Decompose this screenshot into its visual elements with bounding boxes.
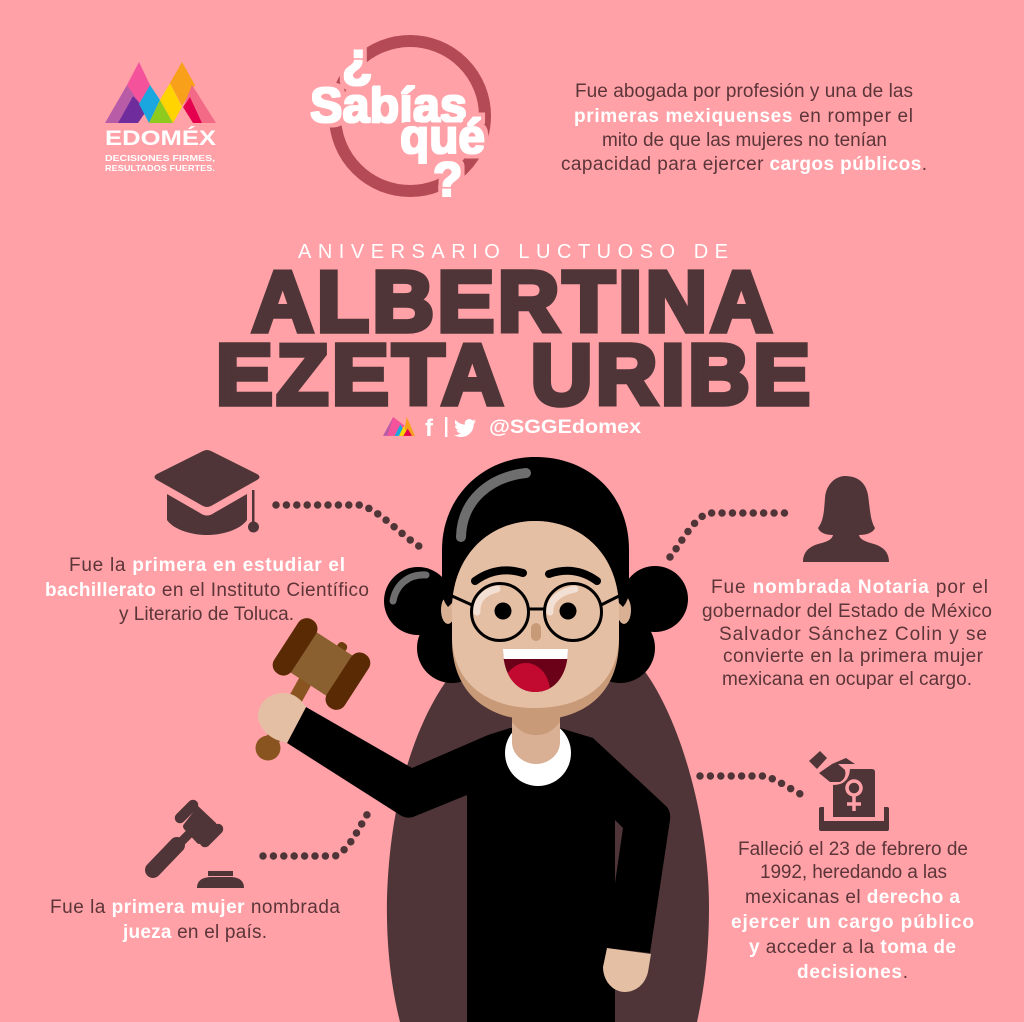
text: notaria: Fue nombrada Notaria por el bbox=[711, 577, 988, 598]
text: notaria: Salvador Sánchez Colin y se bbox=[719, 624, 987, 645]
ears bbox=[441, 596, 455, 624]
intro text: Fue abogada por profesión y una de las bbox=[575, 81, 913, 102]
neck bbox=[512, 700, 560, 764]
mouth bbox=[503, 649, 568, 692]
icon: woman silhouette bbox=[803, 476, 889, 562]
robe bbox=[387, 665, 709, 1022]
text: jueza: Fue la primera mujer nombrada bbox=[50, 897, 340, 918]
intro text: mito de que las mujeres no tenían bbox=[602, 130, 887, 151]
icon: small gavel bbox=[153, 805, 244, 888]
text: bachillerato: y Literario de Toluca. bbox=[119, 604, 294, 625]
logo: Edoméx: RESULTADOS FUERTES. bbox=[105, 163, 215, 173]
text: notaria: convierte en la primera mujer bbox=[723, 646, 984, 667]
text: jueza: jueza en el país. bbox=[122, 922, 267, 943]
character: judge bbox=[256, 457, 709, 1022]
text: legado: Falleció el 23 de febrero de bbox=[738, 839, 968, 860]
robe torso and sleeves bbox=[287, 707, 670, 953]
text: legado: ejercer un cargo público bbox=[731, 912, 974, 933]
right hand bbox=[603, 948, 651, 992]
text: bachillerato: bachillerato en el Instituto Científico bbox=[45, 580, 369, 601]
collar bbox=[505, 720, 571, 786]
text: notaria bbox=[702, 577, 992, 690]
left hand bbox=[258, 693, 306, 743]
logo: Edoméx bbox=[105, 62, 216, 173]
title: ANIVERSARIO LUCTUOSO DE bbox=[298, 241, 728, 263]
title: ALBERTINA bbox=[252, 255, 772, 350]
social handle: f bbox=[425, 415, 434, 442]
social handle: @SGGEdomex bbox=[489, 417, 641, 438]
icon: graduation cap bbox=[154, 450, 260, 535]
intro text: capacidad para ejercer cargos públicos. bbox=[561, 154, 927, 175]
logo: Edoméx: DECISIONES FIRMES, bbox=[105, 153, 215, 163]
icon: ballot box bbox=[809, 751, 889, 831]
badge: ¿Sabías qué?: ¿ bbox=[342, 32, 373, 88]
nose bbox=[531, 623, 541, 641]
text: legado: decisiones. bbox=[797, 962, 908, 983]
hair side strands bbox=[442, 560, 455, 607]
text: legado: mexicanas el derecho a bbox=[745, 887, 960, 908]
text: jueza bbox=[50, 897, 340, 943]
text: legado bbox=[731, 839, 974, 983]
badge: ¿Sabías qué?: ? bbox=[433, 154, 462, 207]
intro text: primeras mexiquenses en romper el bbox=[574, 106, 913, 127]
hair buns bbox=[384, 566, 688, 683]
badge: ¿Sabías qué?: qué bbox=[400, 111, 485, 164]
highlights on hair bbox=[393, 473, 526, 601]
title: EZETA URIBE bbox=[216, 328, 810, 423]
text: notaria: mexicana en ocupar el cargo. bbox=[722, 669, 972, 690]
dotted connector: cap bbox=[276, 505, 422, 548]
glasses bbox=[452, 584, 619, 640]
dotted connector: woman bbox=[670, 513, 788, 557]
text: bachillerato bbox=[45, 555, 369, 625]
intro text bbox=[561, 81, 927, 175]
dotted connector: small gavel bbox=[263, 810, 370, 856]
title bbox=[216, 241, 810, 423]
text: notaria: gobernador del Estado de México bbox=[702, 601, 992, 622]
text: bachillerato: Fue la primera en estudiar el bbox=[69, 555, 345, 576]
logo: Edoméx: EDOMÉX bbox=[105, 127, 216, 150]
eyebrows bbox=[475, 570, 597, 581]
social handle bbox=[383, 415, 641, 442]
pupils bbox=[494, 602, 512, 620]
badge: ¿Sabías qué? bbox=[310, 32, 485, 207]
face bbox=[452, 521, 619, 720]
hair dome bbox=[442, 457, 629, 607]
text: legado: 1992, heredando a las bbox=[760, 862, 947, 883]
badge: ¿Sabías qué?: Sabías bbox=[310, 79, 467, 133]
text: legado: y acceder a la toma de bbox=[749, 937, 956, 958]
gavel bbox=[256, 614, 374, 760]
dotted connector: ballot bbox=[700, 776, 804, 796]
